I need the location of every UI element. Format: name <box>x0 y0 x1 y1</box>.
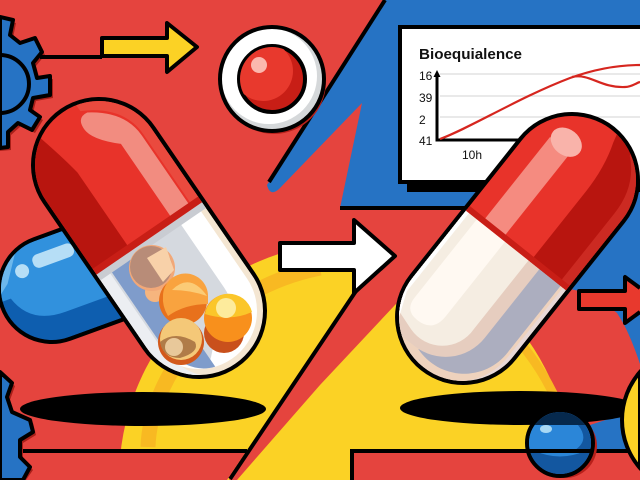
capsule: left red and clear <box>31 97 267 379</box>
chart frame <box>400 27 640 182</box>
chart y axis labels: 2 <box>419 113 426 127</box>
background: yellow circle <box>119 243 572 480</box>
chart y axis labels <box>419 69 433 148</box>
chart y axis labels: 16 <box>419 69 433 83</box>
chart grid lines <box>440 74 640 117</box>
icon: yellow ball right <box>622 372 640 468</box>
bead: brown low <box>158 318 204 365</box>
capsule: blue behind <box>0 228 124 344</box>
connector line from gear to arrow <box>40 55 102 59</box>
chart x axis label: 10h <box>462 148 482 162</box>
red half <box>35 101 202 275</box>
icon: blue gear top left <box>0 17 53 151</box>
chart: bioequivalence panel <box>400 27 640 192</box>
arrow: white <box>280 220 395 293</box>
capsule beads <box>129 245 252 365</box>
bottom right red panel <box>352 450 640 480</box>
chart shadow <box>407 180 640 192</box>
arrow: yellow <box>102 23 197 72</box>
background: blue angular field <box>267 0 640 450</box>
icon: red ball in white ring <box>220 27 326 134</box>
chart y axis labels: 39 <box>419 91 433 105</box>
red half <box>466 116 636 290</box>
bead: dark orange low <box>204 313 244 353</box>
icon: blue gear bottom left <box>0 372 36 480</box>
capsule: right red and white <box>395 112 640 385</box>
chart title: Bioequialence <box>419 46 522 63</box>
bottom left red panel <box>18 450 247 480</box>
bead: tan top <box>129 245 175 302</box>
ground shadow right <box>400 391 640 425</box>
ground shadow left <box>20 392 266 426</box>
blue capsule highlights <box>12 242 77 280</box>
white half <box>399 210 568 381</box>
background: red diagonal band <box>229 232 470 480</box>
icon: blue ball <box>525 408 597 480</box>
chart axes <box>434 70 540 140</box>
bead: gold bright <box>204 294 252 342</box>
clear half <box>96 202 263 375</box>
bead: orange middle <box>159 274 208 325</box>
chart y axis labels: 41 <box>419 134 433 148</box>
chart red curves <box>440 65 640 139</box>
arrow: red <box>579 277 640 323</box>
